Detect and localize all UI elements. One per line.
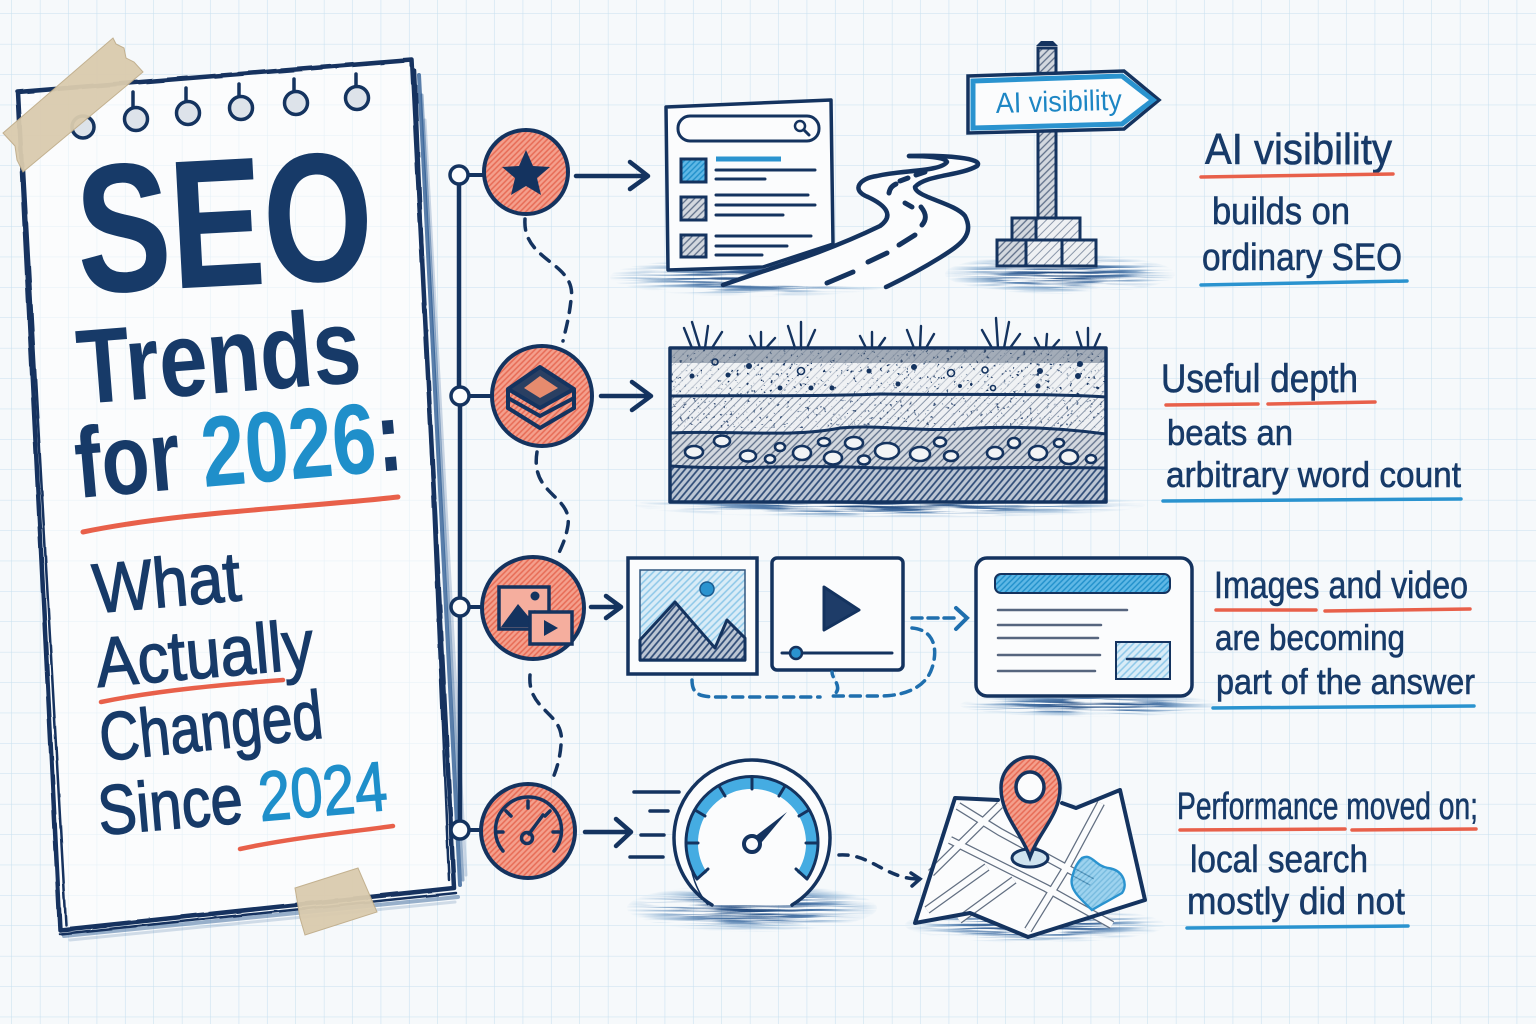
sign board	[968, 71, 1159, 133]
result lines	[716, 159, 815, 255]
map outline	[915, 790, 1145, 937]
result thumbnails	[681, 159, 706, 257]
grass	[684, 318, 1100, 348]
tape bottom	[295, 868, 377, 935]
takeaway: images and video: Images and video	[1214, 565, 1468, 607]
takeaway: images and video: are becoming	[1215, 617, 1405, 658]
subtitle: What: What	[90, 537, 244, 628]
needle	[749, 812, 787, 848]
underline: 2026	[83, 497, 398, 532]
paper shadow	[64, 75, 466, 940]
takeaway: useful depth	[1161, 357, 1461, 501]
search bar	[678, 116, 819, 141]
stone base	[997, 218, 1096, 266]
location pin	[1001, 757, 1060, 867]
takeaway: images and video: part of the answer	[1216, 661, 1475, 702]
illustration: soil layers	[635, 318, 1145, 518]
title	[70, 113, 407, 850]
spiral rings	[72, 74, 368, 138]
layer: bedrock	[670, 466, 1106, 502]
paper outline	[18, 60, 456, 934]
takeaway: AI visibility	[1201, 125, 1407, 285]
takeaway: images and video	[1213, 565, 1475, 708]
dashed connectors between icons	[525, 219, 572, 778]
icon: media circle	[482, 557, 584, 659]
takeaway: performance	[1177, 786, 1478, 928]
title: SEO: SEO	[71, 113, 378, 332]
tape top	[3, 38, 143, 172]
speed lines	[630, 792, 679, 857]
layer: pebbles	[670, 427, 1106, 468]
illustration: speedometer	[627, 760, 877, 932]
ground shadow	[635, 492, 1145, 518]
subtitle: Changed: Changed	[96, 677, 326, 776]
illustration: image frame	[628, 558, 757, 674]
blue dial band	[692, 783, 812, 876]
arrows from icons	[576, 162, 651, 846]
underline: 2024	[240, 826, 393, 849]
takeaway: performance: local search	[1190, 839, 1368, 881]
sign text: AI visibility	[995, 85, 1123, 120]
blue heading bar	[995, 574, 1170, 593]
illustration: search page	[610, 100, 910, 297]
takeaway: useful depth: Useful depth	[1161, 357, 1358, 401]
dashed flow into answer card	[692, 608, 967, 697]
post	[1038, 48, 1056, 218]
layer: topsoil	[670, 348, 1106, 397]
layer: subsoil	[670, 394, 1106, 434]
takeaway: performance: mostly did not	[1187, 881, 1405, 923]
title: for 2026: for 2026:	[70, 380, 407, 520]
ground shadow	[610, 257, 910, 297]
layer boundaries	[670, 348, 1106, 502]
dashed arrow to map	[839, 855, 920, 886]
underline: Actually	[101, 680, 283, 702]
subtitle: Actually: Actually	[93, 605, 316, 702]
lake	[1072, 857, 1125, 910]
illustration: map with pin	[905, 757, 1165, 943]
subtitle: Since 2024: Since 2024	[95, 747, 390, 850]
illustration: winding road	[723, 156, 978, 287]
illustration: video frame	[772, 558, 903, 670]
icon: star circle	[484, 130, 568, 214]
timeline spine	[450, 166, 491, 839]
icon: layers circle	[492, 346, 592, 446]
takeaway: AI visibility: AI visibility	[1205, 125, 1392, 174]
title: Trends: Trends	[73, 287, 365, 427]
illustration: signpost	[945, 41, 1175, 294]
takeaway: useful depth: arbitrary word count	[1166, 454, 1461, 495]
takeaway: AI visibility: builds on	[1212, 191, 1350, 233]
takeaway: useful depth: beats an	[1167, 412, 1293, 453]
illustration: answer card	[960, 558, 1220, 717]
map roads	[927, 803, 1112, 930]
icon: gauge circle	[481, 784, 575, 878]
thumbnail	[1116, 642, 1170, 679]
ground shadow	[945, 254, 1175, 294]
takeaway: AI visibility: ordinary SEO	[1202, 237, 1402, 279]
